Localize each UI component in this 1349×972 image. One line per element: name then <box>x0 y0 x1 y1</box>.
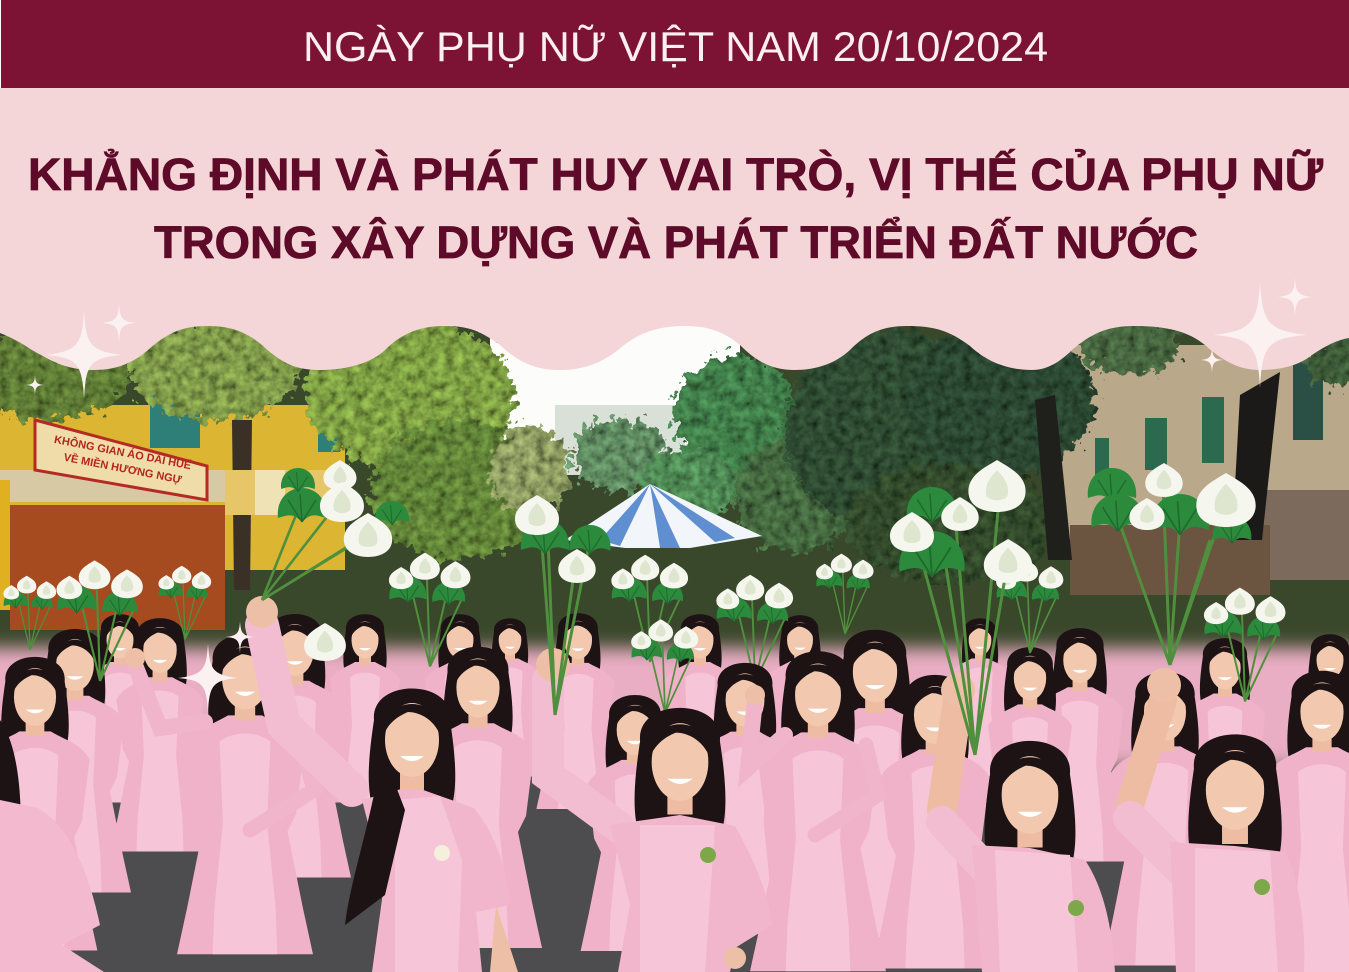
striped parade tent <box>565 484 762 548</box>
back crowd <box>0 613 1349 938</box>
tree trunks <box>232 372 1280 590</box>
pink wave header panel <box>0 88 1349 370</box>
woman in foreground, left edge <box>0 720 104 972</box>
photo: parade of women in pink ao dai <box>0 315 1349 972</box>
photo base: sky and buildings <box>0 320 1349 972</box>
woman in foreground, centre <box>536 648 772 972</box>
street level shops <box>0 470 345 630</box>
woman in foreground with glasses <box>941 673 1115 972</box>
sparkles on the wave, right <box>1201 278 1312 388</box>
large lotus bouquet, right centre <box>890 460 1032 755</box>
small sparkle on photo <box>226 621 254 653</box>
sparkle on photo <box>178 644 238 712</box>
main title <box>28 149 1324 268</box>
foliage of the street trees <box>0 315 1349 585</box>
large lotus bouquet, centre <box>515 495 611 715</box>
top banner <box>1 0 1349 88</box>
large lotus bouquet, left <box>262 460 409 661</box>
main title: KHẲNG ĐỊNH VÀ PHÁT HUY VAI TRÒ, VỊ THẾ CỦA PHỤ NỮ <box>28 149 1324 200</box>
middle row of women <box>0 634 1349 972</box>
banner text: NGÀY PHỤ NỮ VIỆT NAM 20/10/2024 <box>303 23 1048 70</box>
shop sign: KHÔNG GIAN ÁO DÀI HUẾ <box>53 433 192 472</box>
woman in foreground, right <box>1130 668 1304 972</box>
shop sign: VỀ MIỀN HƯƠNG NGỰ <box>63 451 184 487</box>
main title: TRONG XÂY DỰNG VÀ PHÁT TRIỂN ĐẤT NƯỚC <box>154 217 1198 268</box>
woman in foreground, centre left <box>246 596 518 972</box>
road <box>0 770 1349 972</box>
small bouquets in the crowd <box>3 553 1285 713</box>
large lotus bouquet, right <box>1088 463 1256 665</box>
shop sign <box>35 420 207 500</box>
sparkles on the wave, left <box>26 304 136 399</box>
